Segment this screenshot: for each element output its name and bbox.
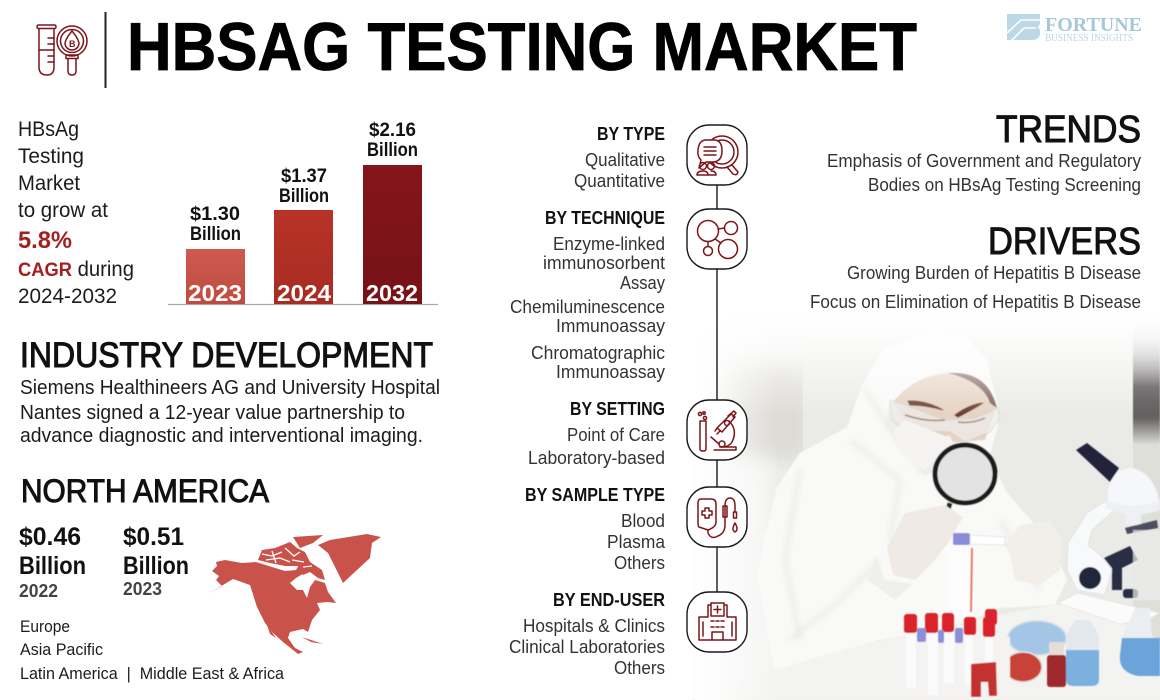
industry development text: Siemens Healthineers AG and University Hospital — [20, 377, 440, 399]
table — [690, 602, 1160, 700]
segment: by end-user: Others — [614, 658, 665, 678]
segment: by end-user: Hospitals & Clinics — [523, 616, 665, 636]
segment: by technique: Enzyme-linked — [553, 234, 665, 254]
growth statement — [18, 118, 134, 308]
photo: scientist examining blood sample — [690, 315, 1160, 700]
north america values: 2023 — [123, 579, 162, 599]
other regions — [20, 617, 285, 683]
suit folds — [785, 385, 1040, 640]
segment: by technique: BY TECHNIQUE — [545, 208, 665, 228]
heading: north america: NORTH AMERICA — [21, 473, 270, 509]
icon: by sample type — [687, 487, 747, 547]
industry development text: advance diagnostic and interventional imaging. — [20, 425, 423, 447]
bar 2024: $1.37 — [281, 166, 327, 187]
bar 2032: $2.16 — [369, 120, 416, 141]
timeline connector — [716, 185, 718, 592]
bar chart: market size — [168, 120, 438, 306]
trends — [827, 109, 1141, 195]
header icon: test tube and blood magnifier: B — [69, 39, 76, 49]
segment: by sample type: BY SAMPLE TYPE — [525, 485, 665, 505]
industry development text — [20, 377, 440, 447]
growth statement: to grow at — [18, 199, 108, 222]
other regions: Asia Pacific — [20, 640, 103, 659]
segment: by technique: immunosorbent — [543, 253, 665, 273]
map: North America — [208, 534, 381, 654]
title: HBSAG TESTING MARKET — [127, 9, 917, 85]
segment: by setting: Point of Care — [567, 425, 665, 445]
trends: Emphasis of Government and Regulatory — [827, 151, 1141, 171]
bottle blue — [1066, 620, 1099, 686]
icon: by end-user — [687, 592, 747, 652]
logo: Fortune Business Insights: BUSINESS INSIGHTS — [1045, 33, 1133, 44]
sample tube — [953, 533, 970, 545]
north america values: $0.51 — [123, 523, 184, 551]
flask blue — [1120, 638, 1160, 676]
growth statement: Market — [18, 172, 80, 195]
chair back — [728, 530, 775, 680]
north america values: Billion — [19, 552, 86, 580]
bar 2032: 2032 — [366, 280, 418, 306]
segment: by setting: Laboratory-based — [528, 448, 665, 468]
bar 2032: Billion — [367, 140, 418, 161]
other regions: Latin America | Middle East & Africa — [20, 664, 285, 683]
logo: Fortune Business Insights: FORTUNE — [1045, 14, 1142, 36]
segment: by technique: Chemiluminescence — [510, 297, 665, 317]
bar 2023: $1.30 — [190, 204, 240, 225]
bar 2024 — [274, 166, 333, 306]
segment: by type: Qualitative — [585, 150, 665, 170]
drivers — [810, 221, 1141, 312]
north america values: Billion — [123, 552, 189, 580]
suit — [757, 330, 1067, 672]
bar 2024: 2024 — [277, 280, 331, 306]
drivers: Focus on Elimination of Hepatitis B Disease — [810, 292, 1141, 312]
segment: by sample type — [525, 485, 666, 573]
petri dish blue — [1008, 621, 1066, 655]
north america values: $0.46 — [19, 523, 81, 551]
segment: by type: Quantitative — [574, 171, 665, 191]
industry development text: Nantes signed a 12-year value partnership to — [20, 402, 405, 424]
segment: by technique: Immunoassay — [556, 362, 665, 382]
logo: Fortune Business Insights — [1007, 14, 1142, 44]
bar 2024: Billion — [279, 186, 329, 207]
other regions: Europe — [20, 617, 70, 636]
segment: by technique: Immunoassay — [556, 316, 665, 336]
segment: by setting — [528, 399, 665, 468]
vial red — [1047, 655, 1066, 687]
growth statement: Testing — [18, 145, 84, 168]
magnifier — [945, 503, 950, 520]
icon: by setting — [687, 400, 747, 460]
segment: by sample type: Plasma — [607, 532, 666, 552]
bar 2023: Billion — [190, 224, 241, 245]
segment: by type — [574, 124, 665, 191]
growth statement: 5.8% — [18, 227, 72, 254]
segment: by sample type: Blood — [621, 511, 665, 531]
drivers: DRIVERS — [988, 221, 1141, 263]
trends: Bodies on HBsAg Testing Screening — [868, 175, 1141, 195]
red dish — [1004, 652, 1042, 682]
segment: by end-user: Clinical Laboratories — [509, 637, 665, 657]
bar 2023: 2023 — [188, 280, 242, 306]
growth statement: HBsAg — [18, 118, 79, 141]
north america values: 2022 — [19, 581, 58, 601]
trends: TRENDS — [996, 109, 1141, 151]
segment: by end-user — [509, 590, 665, 678]
icon: by technique — [687, 209, 747, 269]
bar 2023 — [186, 204, 245, 306]
segment: by technique: Chromatographic — [531, 343, 665, 363]
segment: by technique — [510, 208, 665, 382]
growth statement: CAGR during — [18, 258, 134, 281]
goggles — [890, 400, 1000, 442]
growth statement: 2024-2032 — [18, 285, 117, 308]
face — [893, 373, 996, 445]
header icon: test tube and blood magnifier — [37, 25, 87, 75]
tube rack — [903, 637, 1010, 700]
segment: by sample type: Others — [614, 553, 665, 573]
bar 2032 — [363, 120, 422, 306]
segment: by setting: BY SETTING — [570, 399, 665, 419]
header divider — [104, 12, 106, 88]
drivers: Growing Burden of Hepatitis B Disease — [847, 263, 1141, 283]
segment: by technique: Assay — [620, 273, 665, 293]
mask — [893, 420, 955, 470]
gloves — [887, 505, 963, 580]
microscope — [1076, 443, 1119, 482]
segment: by type: BY TYPE — [597, 124, 665, 144]
icon: by type — [687, 125, 747, 185]
heading: industry development: INDUSTRY DEVELOPMENT — [20, 336, 433, 375]
segment: by end-user: BY END-USER — [553, 590, 665, 610]
north america values — [19, 523, 189, 601]
